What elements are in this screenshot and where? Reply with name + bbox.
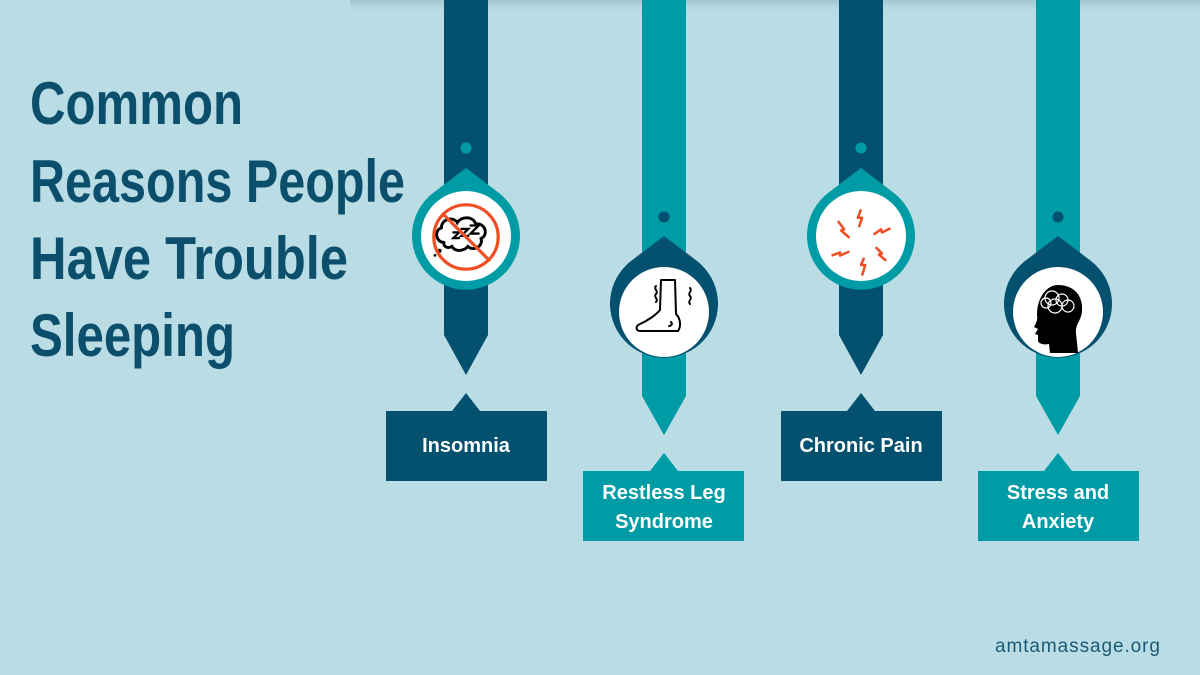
title: Common [30,70,243,137]
footer url: amtamassage.org [995,636,1160,657]
icon: head [1034,285,1082,353]
label: stress and anxiety: Anxiety [1022,511,1095,533]
label: chronic pain: Chronic Pain [799,435,923,457]
icon: no sleep [434,205,498,269]
label: restless leg syndrome [583,453,744,541]
label: restless leg syndrome: Restless Leg [602,482,726,504]
label: insomnia: Insomnia [422,435,511,457]
icon: pain bolts [832,209,890,276]
panel: insomnia [386,0,547,481]
title: Reasons People [30,148,405,215]
title: Sleeping [30,302,235,369]
title: Have Trouble [30,225,348,292]
label: chronic pain [781,393,942,481]
panel: restless leg [583,0,744,541]
label: stress and anxiety [978,453,1139,541]
icon: leg [637,280,691,331]
panel: chronic pain [781,0,942,481]
title [30,70,405,369]
label: insomnia [386,393,547,481]
label: restless leg syndrome: Syndrome [615,511,713,533]
panel: stress and anxiety [978,0,1139,541]
label: stress and anxiety: Stress and [1007,482,1109,504]
